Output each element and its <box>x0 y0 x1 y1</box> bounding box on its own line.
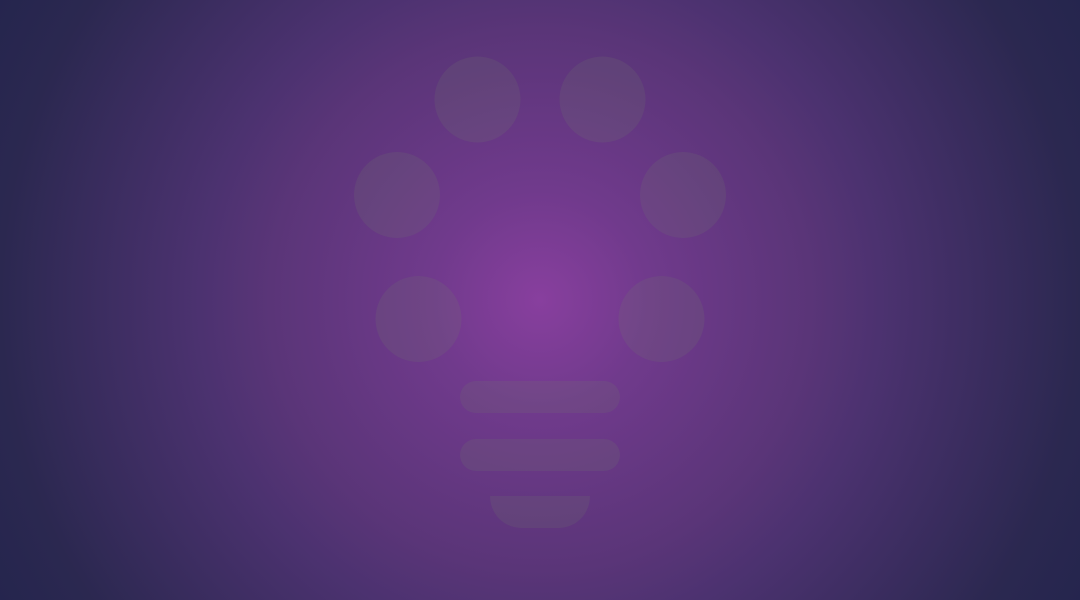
bulb dot: top right <box>560 56 646 142</box>
bulb base: upper bar <box>460 381 620 413</box>
bulb dot: middle left <box>354 152 440 238</box>
bulb base: lower bar <box>460 439 620 471</box>
bulb dot: middle right <box>640 152 726 238</box>
bulb dot: lower right <box>618 276 704 362</box>
bulb base: cap <box>490 496 590 528</box>
bulb dot: lower left <box>376 276 462 362</box>
bulb dot: top left <box>434 56 520 142</box>
